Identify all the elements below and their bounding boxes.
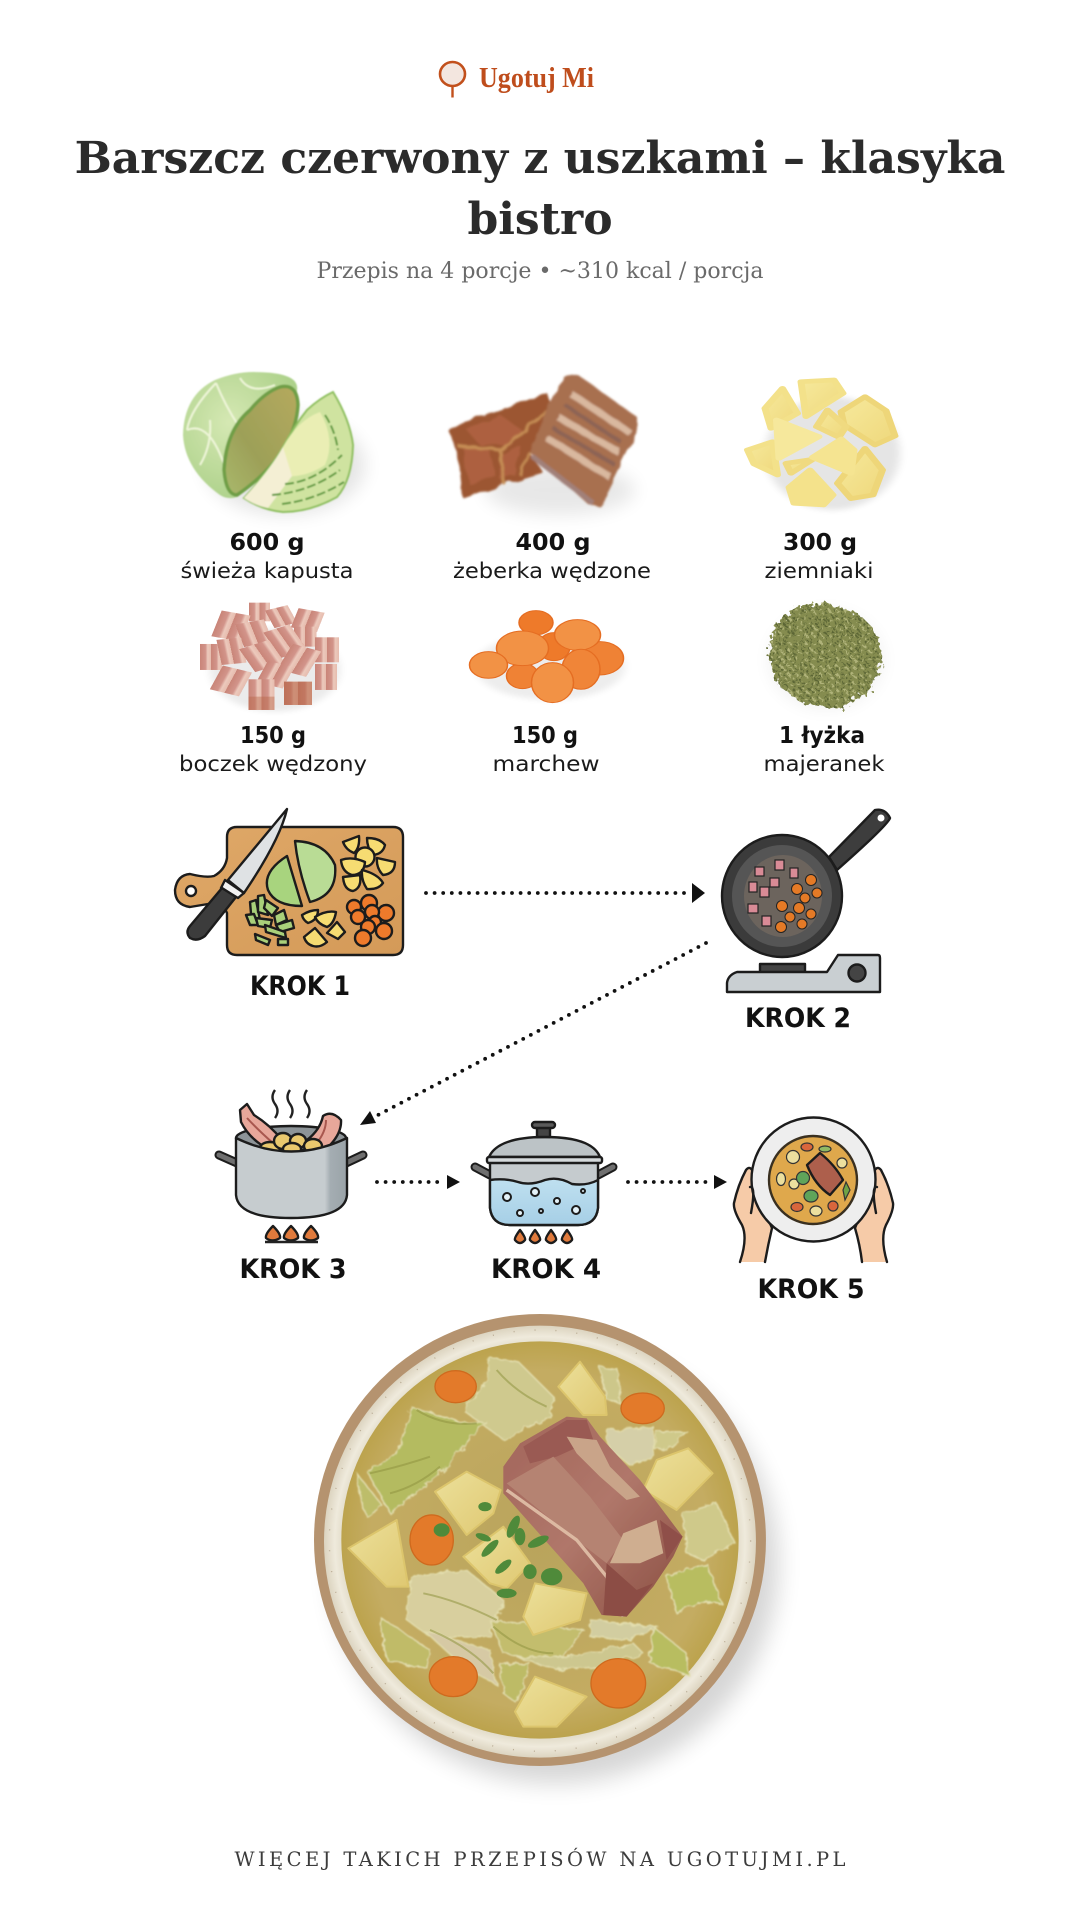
subtitle: Przepis na 4 porcje • ~310 kcal / porcja <box>316 259 764 284</box>
step 5 label: KROK 5 <box>758 1274 864 1305</box>
soup: smoked rib <box>503 1417 683 1617</box>
arrow: step 2 to 3 <box>360 943 706 1125</box>
ingredient: smoked ribs <box>450 375 637 515</box>
panel: ingredients <box>179 372 900 776</box>
ingredient labels: 150 g <box>240 723 306 749</box>
ingredient labels: marchew <box>492 752 600 776</box>
arrow: step 1 to 2 <box>426 883 705 903</box>
ingredient labels: 1 łyżka <box>779 723 865 749</box>
step 4 label: KROK 4 <box>491 1254 601 1285</box>
step 2 icon: frying pan on burner <box>722 810 890 992</box>
title: Barszcz czerwony z uszkami – klasyka <box>75 133 1005 184</box>
step 2 label: KROK 2 <box>745 1003 851 1034</box>
step 1 icon: cutting board <box>175 809 403 955</box>
title: bistro <box>467 194 613 245</box>
title <box>75 133 1005 245</box>
ingredient labels: ziemniaki <box>764 559 874 583</box>
panel: steps <box>175 809 893 1305</box>
ingredient labels: 150 g <box>512 723 578 749</box>
step 1 label: KROK 1 <box>250 971 350 1002</box>
ingredient: bacon cubes <box>200 603 340 712</box>
final dish: soup bowl <box>314 1314 778 1783</box>
step 3 icon: pot with ribs <box>219 1090 363 1242</box>
logo: Ugotuj Mi: Ugotuj Mi <box>479 63 594 94</box>
ingredient labels: 600 g <box>230 530 304 556</box>
soup: herb sprig <box>434 1502 562 1598</box>
ingredient: carrot slices <box>470 611 625 703</box>
ingredient labels: świeża kapusta <box>180 559 354 583</box>
ingredient labels: 400 g <box>516 530 590 556</box>
logo: Ugotuj Mi <box>440 62 594 98</box>
soup: carrots <box>410 1371 664 1708</box>
ingredient labels: 300 g <box>783 530 857 556</box>
ingredient labels: żeberka wędzone <box>453 559 651 583</box>
soup: cabbage leaves <box>357 1357 735 1703</box>
footer: WIĘCEJ TAKICH PRZEPISÓW NA UGOTUJMI.PL <box>234 1846 846 1871</box>
step 4 icon: boiling pot <box>475 1122 613 1243</box>
step 3 label: KROK 3 <box>240 1254 346 1285</box>
ingredient: cabbage <box>183 372 365 515</box>
ingredient labels: majeranek <box>764 752 885 776</box>
ingredient labels <box>179 530 885 776</box>
arrow: step 3 to 4 <box>377 1175 460 1189</box>
ingredient: potatoes <box>748 380 900 510</box>
step 5 icon: hands holding plate <box>734 1118 893 1262</box>
ingredient: marjoram <box>768 602 883 708</box>
soup: potatoes <box>348 1362 713 1727</box>
arrow: step 4 to 5 <box>628 1175 727 1189</box>
ingredient labels: boczek wędzony <box>179 752 367 776</box>
